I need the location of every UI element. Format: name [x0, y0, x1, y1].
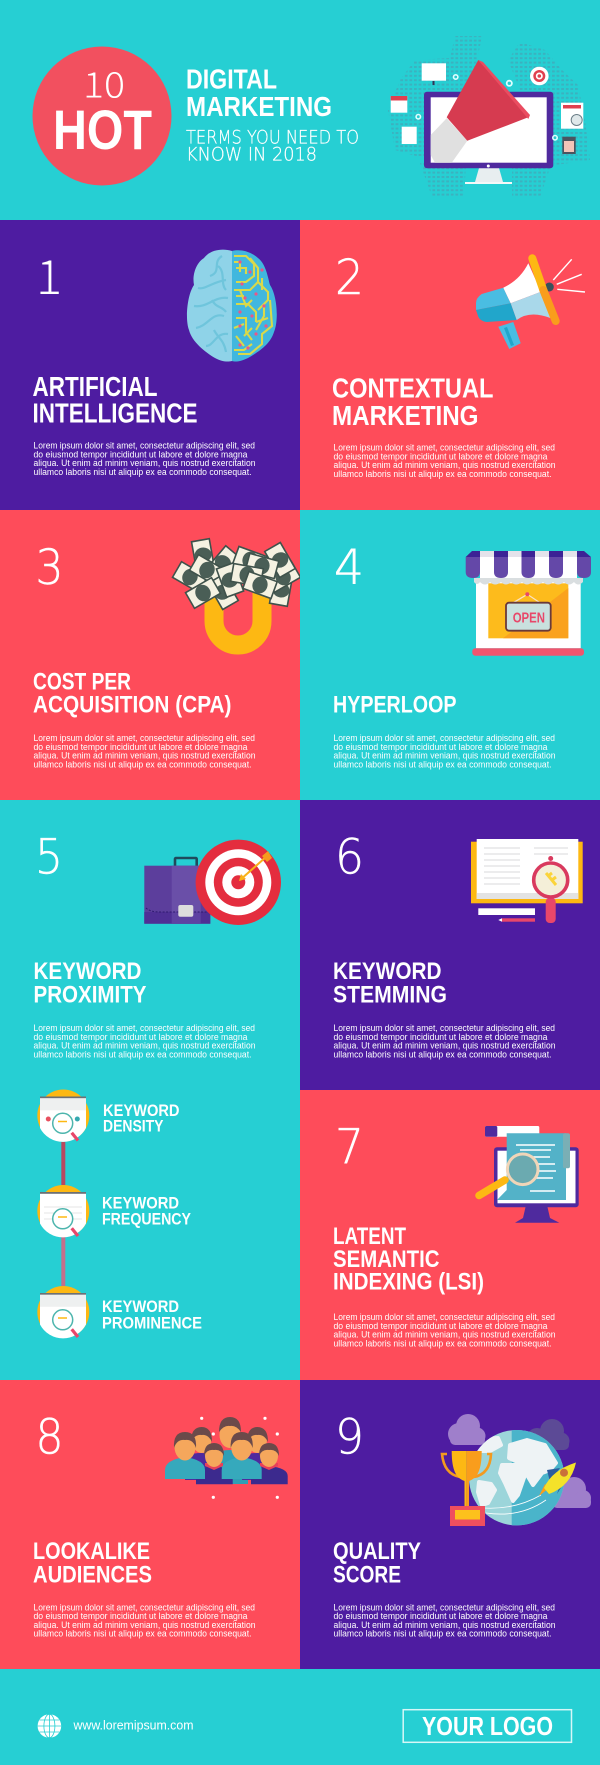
panel: 2 contextual marketing	[300, 220, 600, 510]
panel: header	[0, 0, 600, 220]
heading: INDEXING (LSI)	[333, 1269, 484, 1296]
body text: ullamco laboris nisi ut aliquip ex ea commodo consequat.	[34, 1628, 252, 1638]
body text: Lorem ipsum dolor sit amet, consectetur adipiscing elit, sed	[334, 733, 555, 743]
keyword prominence: PROMINENCE	[102, 1313, 202, 1332]
body text: aliqua. Ut enim ad minim veniam, quis nostrud exercitation	[334, 460, 556, 470]
body text: Lorem ipsum dolor sit amet, consectetur adipiscing elit, sed	[34, 733, 255, 743]
number 6: 6	[335, 830, 364, 886]
body text	[34, 733, 256, 770]
heading	[33, 668, 232, 719]
body text	[334, 1312, 556, 1348]
heading	[34, 958, 146, 1008]
title text	[186, 63, 359, 166]
panel: 1 artificial intelligence	[0, 220, 300, 510]
body text: ullamco laboris nisi ut aliquip ex ea commodo consequat.	[34, 467, 252, 477]
heading: ACQUISITION (CPA)	[33, 692, 232, 719]
body text: do eiusmod tempor incididunt ut labore et dolore magna	[34, 742, 248, 752]
icon: open shop: OPEN	[513, 609, 545, 626]
body text: do eiusmod tempor incididunt ut labore et dolore magna	[334, 742, 548, 752]
website url: www.loremipsum.com	[73, 1718, 194, 1732]
body text: do eiusmod tempor incididunt ut labore et dolore magna	[34, 449, 248, 459]
body text: ullamco laboris nisi ut aliquip ex ea commodo consequat.	[34, 1050, 252, 1060]
heading: AUDIENCES	[33, 1561, 152, 1588]
heading: SCORE	[333, 1561, 401, 1588]
body text	[334, 1023, 556, 1060]
body text: ullamco laboris nisi ut aliquip ex ea commodo consequat.	[34, 760, 252, 770]
heading: PROXIMITY	[34, 981, 146, 1008]
heading	[333, 1223, 484, 1296]
heading	[333, 1538, 421, 1588]
icon: magnet with money	[173, 539, 300, 645]
icon: book and magnifier	[471, 839, 583, 923]
title badge: 10 hot: 10	[83, 57, 125, 108]
body text	[34, 1023, 256, 1060]
body text: ullamco laboris nisi ut aliquip ex ea commodo consequat.	[334, 469, 552, 479]
body text: Lorem ipsum dolor sit amet, consectetur adipiscing elit, sed	[34, 441, 255, 451]
keyword prominence	[37, 1286, 202, 1338]
body text: do eiusmod tempor incididunt ut labore et dolore magna	[334, 451, 548, 461]
icon: group of people	[165, 1417, 288, 1499]
title badge: 10 hot	[32, 46, 172, 186]
number 5: 5	[35, 830, 63, 886]
body text: aliqua. Ut enim ad minim veniam, quis nostrud exercitation	[34, 458, 256, 468]
heading	[333, 958, 447, 1008]
body text: ullamco laboris nisi ut aliquip ex ea commodo consequat.	[334, 1628, 552, 1638]
keyword prominence: KEYWORD	[102, 1297, 179, 1316]
panel: 7 latent semantic indexing	[300, 1090, 600, 1380]
heading: ARTIFICIAL	[32, 371, 158, 402]
heading: LOOKALIKE	[33, 1538, 150, 1565]
body text: Lorem ipsum dolor sit amet, consectetur adipiscing elit, sed	[34, 1602, 255, 1612]
body text: Lorem ipsum dolor sit amet, consectetur adipiscing elit, sed	[34, 1023, 255, 1033]
body text: aliqua. Ut enim ad minim veniam, quis nostrud exercitation	[334, 1620, 556, 1630]
heading: COST PER	[33, 668, 131, 695]
number 7: 7	[335, 1119, 364, 1175]
keyword frequency: FREQUENCY	[102, 1209, 192, 1228]
body text: do eiusmod tempor incididunt ut labore et dolore magna	[334, 1321, 548, 1331]
title text: MARKETING	[186, 91, 332, 122]
body text	[34, 1602, 256, 1638]
body text: ullamco laboris nisi ut aliquip ex ea commodo consequat.	[334, 1338, 552, 1348]
body text: aliqua. Ut enim ad minim veniam, quis nostrud exercitation	[334, 1330, 556, 1340]
heading: KEYWORD	[34, 958, 142, 985]
icon: megaphone	[476, 258, 585, 349]
heading	[332, 372, 494, 431]
icon: open shop	[466, 551, 591, 656]
body text: do eiusmod tempor incididunt ut labore et dolore magna	[34, 1032, 248, 1042]
body text	[334, 1602, 556, 1638]
body text: aliqua. Ut enim ad minim veniam, quis nostrud exercitation	[334, 751, 556, 761]
body text	[334, 443, 556, 479]
title badge: 10 hot: HOT	[53, 98, 152, 161]
heading: INTELLIGENCE	[32, 398, 198, 429]
keyword density: DENSITY	[103, 1117, 164, 1136]
number 9: 9	[335, 1410, 364, 1466]
body text: do eiusmod tempor incididunt ut labore et dolore magna	[34, 1611, 248, 1621]
number 1: 1	[36, 239, 62, 308]
heading	[33, 1538, 152, 1588]
body text: aliqua. Ut enim ad minim veniam, quis nostrud exercitation	[34, 751, 256, 761]
title text: DIGITAL	[186, 63, 277, 94]
icon: monitor with megaphone and world map	[388, 36, 590, 197]
body text: aliqua. Ut enim ad minim veniam, quis nostrud exercitation	[34, 1041, 256, 1051]
icon: briefcase and target	[144, 840, 281, 925]
body text: Lorem ipsum dolor sit amet, consectetur adipiscing elit, sed	[334, 1023, 555, 1033]
heading: STEMMING	[333, 981, 447, 1008]
icon: trophy, globe, rocket	[442, 1414, 591, 1531]
heading: LATENT	[333, 1223, 406, 1250]
icon: monitor with document and lens	[479, 1126, 579, 1223]
body text: aliqua. Ut enim ad minim veniam, quis nostrud exercitation	[334, 1041, 556, 1051]
connector line 1	[61, 1142, 65, 1185]
heading: HYPERLOOP	[333, 692, 456, 719]
body text: Lorem ipsum dolor sit amet, consectetur adipiscing elit, sed	[334, 1602, 555, 1612]
heading: SEMANTIC	[333, 1246, 440, 1273]
keyword density: KEYWORD	[103, 1101, 180, 1120]
panel: 5 keyword proximity	[0, 800, 300, 1380]
heading: QUALITY	[333, 1538, 421, 1565]
title text: KNOW IN 2018	[186, 144, 317, 166]
panel: 3 cost per acquisition	[0, 510, 300, 800]
keyword frequency: KEYWORD	[102, 1193, 179, 1212]
title text: TERMS YOU NEED TO	[186, 126, 359, 148]
body text	[334, 733, 556, 770]
number 3: 3	[36, 540, 64, 596]
connector line 2	[61, 1237, 65, 1286]
panel: 6 keyword stemming	[300, 800, 600, 1090]
number 2: 2	[335, 250, 364, 306]
heading: KEYWORD	[333, 958, 442, 985]
body text: Lorem ipsum dolor sit amet, consectetur adipiscing elit, sed	[334, 1312, 555, 1322]
body text: do eiusmod tempor incididunt ut labore et dolore magna	[334, 1611, 548, 1621]
heading	[32, 371, 198, 429]
number 4: 4	[334, 540, 364, 596]
panel: 8 lookalike audiences	[0, 1380, 300, 1669]
logo box: YOUR LOGO	[422, 1713, 553, 1741]
keyword frequency	[37, 1185, 192, 1237]
panel: 4 hyperloop	[300, 510, 600, 800]
body text	[34, 441, 256, 477]
panel: footer	[0, 1669, 600, 1765]
heading: MARKETING	[332, 400, 478, 431]
body text: do eiusmod tempor incididunt ut labore et dolore magna	[334, 1032, 548, 1042]
keyword density	[37, 1090, 179, 1142]
panel: 9 quality score	[300, 1380, 600, 1669]
body text: ullamco laboris nisi ut aliquip ex ea commodo consequat.	[334, 1050, 552, 1060]
heading: CONTEXTUAL	[332, 372, 494, 403]
icon: brain	[187, 250, 277, 362]
body text: aliqua. Ut enim ad minim veniam, quis nostrud exercitation	[34, 1620, 256, 1630]
icon: globe	[38, 1714, 61, 1738]
body text: ullamco laboris nisi ut aliquip ex ea commodo consequat.	[334, 760, 552, 770]
number 8: 8	[36, 1410, 64, 1466]
body text: Lorem ipsum dolor sit amet, consectetur adipiscing elit, sed	[334, 443, 555, 453]
